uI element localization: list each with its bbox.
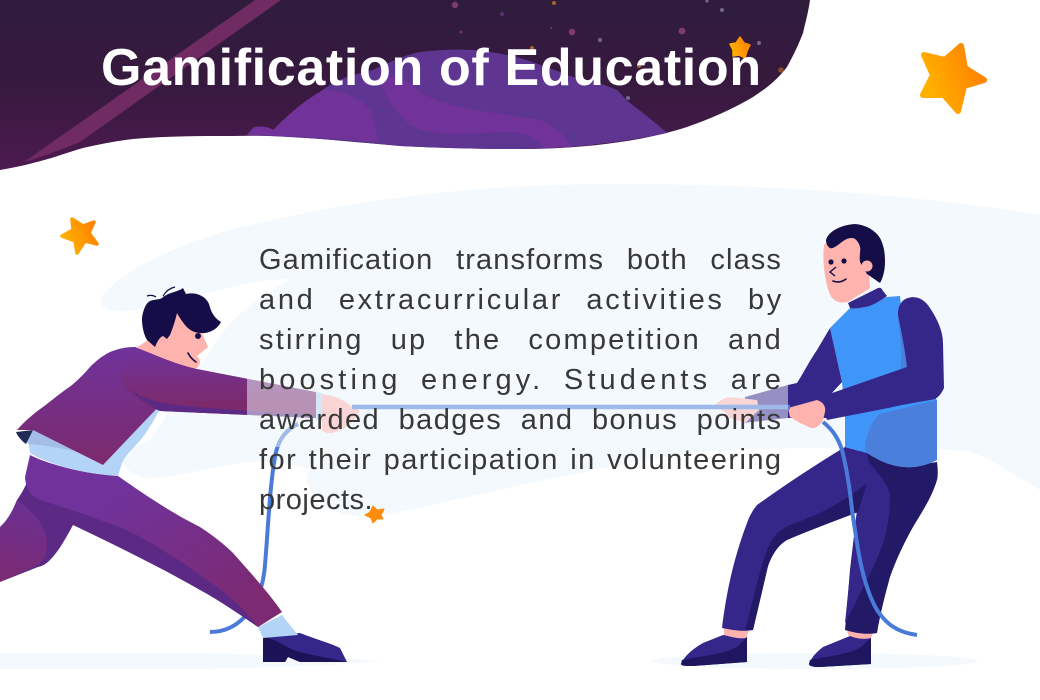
body paragraph: Gamification transforms both class — [259, 244, 782, 276]
far arm — [743, 328, 842, 423]
sleeve shade — [125, 385, 316, 418]
front leg — [722, 447, 872, 631]
shirt dark — [16, 430, 33, 444]
background blob — [100, 184, 1040, 516]
ankle left — [724, 628, 749, 638]
face — [823, 232, 870, 303]
eye — [195, 333, 201, 339]
shoe — [263, 633, 347, 662]
vest lower shade — [865, 400, 937, 467]
rope top — [352, 405, 790, 409]
back leg lobe — [0, 500, 47, 582]
body paragraph: boosting energy. Students are — [259, 364, 785, 396]
header banner — [0, 0, 810, 170]
title: Gamification of Education — [101, 39, 762, 97]
ankle right — [847, 630, 873, 639]
body paragraph: stirring up the competition and — [259, 324, 783, 356]
neck and face — [137, 313, 208, 372]
sole right — [809, 638, 871, 667]
smile — [188, 353, 196, 362]
hair wisps — [147, 287, 175, 297]
hair — [142, 288, 221, 347]
shoe sole — [263, 637, 347, 662]
shoe left — [681, 635, 747, 666]
rope right — [823, 422, 917, 635]
body paragraph: projects. — [259, 484, 373, 516]
vest — [830, 296, 937, 467]
ear — [862, 260, 872, 272]
back leg light — [845, 460, 890, 623]
ground shadow left — [0, 653, 380, 669]
icon: text star — [365, 506, 384, 523]
cuff — [316, 392, 322, 421]
back leg — [845, 448, 938, 634]
icon: header star — [730, 37, 750, 58]
hand left — [713, 397, 759, 423]
shirt shade — [27, 430, 82, 453]
body paragraph — [259, 244, 785, 516]
figure: right man — [681, 224, 944, 667]
trousers — [25, 455, 282, 627]
smile — [833, 279, 846, 282]
stars dust — [452, 0, 784, 100]
diagonal streak — [24, 0, 281, 162]
shirt — [27, 402, 163, 476]
trousers shade — [25, 477, 262, 627]
hand right — [788, 400, 825, 428]
ground shadow right — [652, 653, 978, 669]
rope left — [210, 424, 298, 632]
vest side shade — [898, 300, 908, 372]
near arm — [820, 297, 944, 420]
front leg shade — [745, 483, 867, 630]
figure: left man — [0, 287, 360, 662]
purple mountain — [247, 50, 667, 149]
sleeve — [121, 347, 316, 418]
ear — [158, 324, 171, 338]
hand — [322, 394, 360, 433]
shoe right — [809, 636, 871, 667]
hair — [826, 224, 885, 283]
text backing overlay — [247, 370, 788, 447]
sole left — [681, 637, 747, 666]
jacket body — [17, 347, 200, 465]
icon: left star — [62, 219, 97, 253]
sock — [258, 615, 298, 638]
body paragraph: for their participation in volunteering — [259, 444, 782, 476]
back leg — [0, 480, 90, 582]
body paragraph: and extracurricular activities by — [259, 284, 784, 316]
turtleneck — [848, 288, 887, 308]
icon: big star — [923, 46, 984, 111]
nose — [830, 267, 836, 276]
body paragraph: awarded badges and bonus points — [259, 404, 782, 436]
eyes — [828, 258, 847, 265]
